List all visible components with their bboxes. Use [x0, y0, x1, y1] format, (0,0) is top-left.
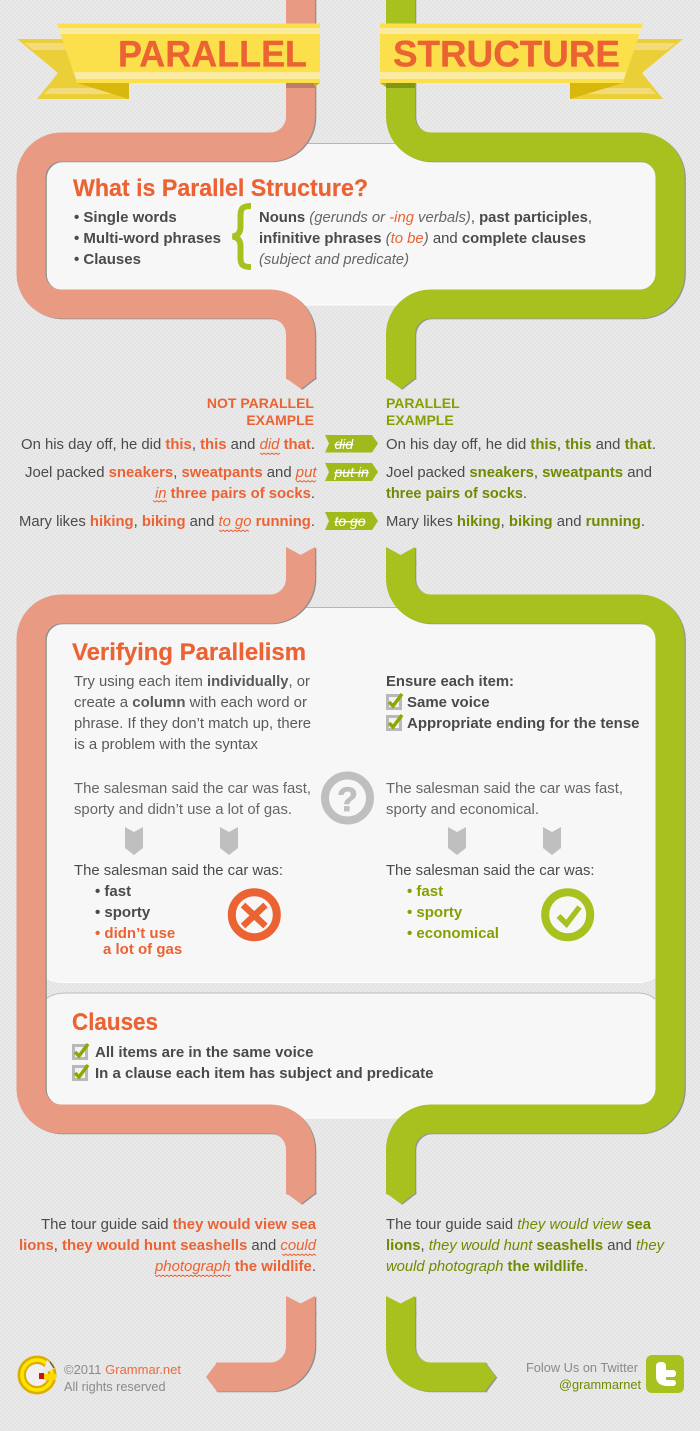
icon: checkbox — [74, 1065, 88, 1080]
icon: green check — [545, 892, 590, 937]
example: tour guide not parallel: The tour guide said they would view sea — [41, 1216, 317, 1233]
arrow: grey down right 2 — [543, 827, 561, 855]
icon: question mark — [325, 776, 370, 820]
icon: grammar.net logo — [18, 1356, 56, 1394]
definition text: infinitive phrases (to be) and complete clauses — [259, 230, 586, 247]
arrow: grey down right 1 — [448, 827, 466, 855]
text: incorrect sentence — [74, 780, 311, 818]
checklist: ensure each item: Same voice — [407, 694, 490, 711]
text: verification instructions: Try using each item individually, or — [74, 673, 310, 690]
example: tour guide not parallel: lions, they would hunt seashells and could — [19, 1237, 317, 1254]
ribbon: green shadow — [387, 0, 671, 1392]
checklist: clauses: In a clause each item has subject and predicate — [95, 1065, 433, 1082]
examples: not parallel sentences — [19, 436, 317, 532]
examples: not parallel sentences: Joel packed sneakers, sweatpants and put — [25, 464, 317, 481]
arrow: grey down left 1 — [125, 827, 143, 855]
examples: not parallel sentences: Mary likes hiking, biking and to go running. — [19, 513, 315, 530]
bullet list: • Clauses — [74, 251, 141, 268]
panel: verifying parallelism background — [40, 607, 660, 983]
examples: parallel sentences: three pairs of socks. — [386, 485, 527, 502]
tag: put in — [325, 463, 378, 481]
checklist: ensure each item: Appropriate ending for the tense — [407, 715, 640, 732]
ribbon: green path — [386, 0, 670, 1392]
heading: parallel example: EXAMPLE — [386, 412, 454, 428]
list: incorrect breakdown: The salesman said the car was: — [74, 862, 283, 879]
text: incorrect sentence: sporty and didn’t use a lot of gas. — [74, 801, 292, 818]
icon: checkbox — [388, 715, 402, 730]
heading: not parallel example: EXAMPLE — [246, 412, 314, 428]
bullet list: • Single words — [74, 209, 177, 226]
examples: parallel sentences: Mary likes hiking, biking and running. — [386, 513, 645, 530]
checklist: clauses — [74, 1044, 433, 1082]
list: incorrect breakdown: a lot of gas — [103, 941, 182, 958]
tag: did: did — [334, 436, 354, 452]
text: correct sentence: The salesman said the car was fast, — [386, 780, 623, 797]
icon: twitter — [646, 1355, 684, 1393]
list: incorrect breakdown: • sporty — [95, 904, 151, 921]
bullet list — [74, 209, 221, 268]
checklist: clauses: All items are in the same voice — [95, 1044, 313, 1061]
tag: to go — [325, 512, 378, 530]
tag: did — [325, 435, 378, 452]
bullet list: • Multi-word phrases — [74, 230, 221, 247]
list: correct breakdown: • sporty — [407, 904, 463, 921]
text: verification instructions: create a column with each word or — [74, 694, 307, 711]
list: incorrect breakdown: • fast — [95, 883, 131, 900]
squiggle underlines — [155, 1254, 316, 1276]
definition text — [259, 209, 592, 268]
heading: not parallel example: NOT PARALLEL — [207, 395, 314, 411]
text: copyright: ©2011 Grammar.net — [64, 1362, 181, 1377]
list: incorrect breakdown — [74, 862, 283, 958]
icon: checkbox — [74, 1044, 88, 1058]
text: correct sentence: sporty and economical. — [386, 801, 539, 818]
text: twitter follow — [526, 1360, 641, 1392]
text: incorrect sentence: The salesman said the car was fast, — [74, 780, 311, 797]
text: verification instructions: is a problem with the syntax — [74, 736, 258, 753]
list: correct breakdown — [386, 862, 594, 942]
text: copyright — [64, 1362, 181, 1394]
title word: PARALLEL — [118, 34, 307, 74]
definition text: (subject and predicate) — [259, 251, 409, 268]
checklist: ensure each item — [386, 673, 640, 732]
ribbon: pink path — [31, 0, 315, 1392]
panel: clauses background — [40, 993, 660, 1118]
text: twitter follow: Folow Us on Twitter — [526, 1360, 639, 1375]
heading: clauses: Clauses — [72, 1009, 158, 1036]
text: verification instructions: phrase. If they don’t match up, there — [74, 715, 311, 732]
examples: parallel sentences: On his day off, he did this, this and that. — [386, 436, 656, 453]
list: correct breakdown: The salesman said the car was: — [386, 862, 594, 879]
heading: What is Parallel Structure? — [73, 175, 368, 202]
example: tour guide parallel — [386, 1216, 665, 1275]
ribbon: pink shadow — [32, 0, 316, 1392]
examples: parallel sentences — [386, 436, 656, 530]
example: tour guide not parallel: photograph the wildlife. — [154, 1258, 316, 1275]
icon: question mark: ? — [337, 781, 358, 819]
icon: orange cross — [232, 892, 277, 937]
banner: left PARALLEL — [17, 24, 320, 99]
tag: to go: to go — [334, 513, 366, 529]
example: tour guide not parallel — [19, 1216, 317, 1276]
section: what is parallel structure content — [73, 175, 592, 268]
icon: green brace — [232, 206, 251, 267]
heading: verifying parallelism: Verifying Parallelism — [72, 639, 306, 666]
list: correct breakdown: • fast — [407, 883, 443, 900]
heading: parallel example: PARALLEL — [386, 395, 460, 411]
examples: not parallel sentences: On his day off, he did this, this and did that. — [21, 436, 315, 453]
text: correct sentence — [386, 780, 623, 818]
text: verification instructions — [74, 673, 311, 753]
example: tour guide parallel: would photograph the wildlife. — [386, 1258, 588, 1275]
heading: parallel example — [386, 395, 460, 428]
list: incorrect breakdown: • didn’t use — [95, 925, 175, 942]
list: correct breakdown: • economical — [407, 925, 499, 942]
heading: not parallel example — [207, 395, 314, 428]
squiggle underlines — [153, 453, 316, 532]
examples: parallel sentences: Joel packed sneakers, sweatpants and — [386, 464, 652, 481]
example: tour guide parallel: lions, they would hunt seashells and they — [386, 1237, 665, 1254]
text: twitter follow: @grammarnet — [559, 1377, 641, 1392]
checklist: ensure each item: Ensure each item: — [386, 673, 514, 690]
text: copyright: All rights reserved — [64, 1379, 166, 1394]
panel: what is parallel structure background — [40, 143, 660, 306]
tag: put in: put in — [334, 464, 369, 480]
banner: right STRUCTURE — [380, 24, 683, 99]
icon: checkbox — [388, 694, 402, 708]
title word: STRUCTURE — [393, 34, 620, 74]
arrow: grey down left 2 — [220, 827, 238, 855]
examples: not parallel sentences: in three pairs of socks. — [155, 485, 315, 502]
definition text: Nouns (gerunds or -ing verbals), past participles, — [259, 209, 592, 226]
example: tour guide parallel: The tour guide said they would view sea — [386, 1216, 652, 1233]
